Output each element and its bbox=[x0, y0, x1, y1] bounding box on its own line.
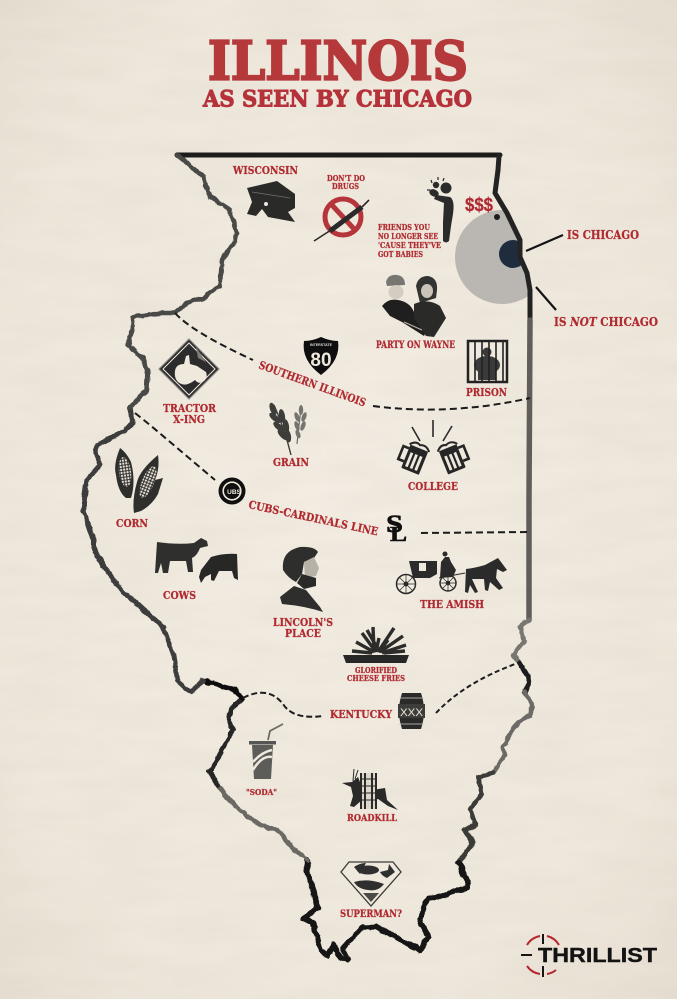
labels: DRUGS bbox=[332, 181, 359, 191]
labels: WISCONSIN bbox=[232, 164, 298, 177]
labels: GOT BABIES bbox=[378, 249, 423, 259]
icon: no drugs bbox=[314, 199, 369, 241]
icon: St. Louis Cardinals logo: L bbox=[390, 522, 407, 546]
labels: CUBS-CARDINALS LINE bbox=[247, 498, 379, 538]
labels bbox=[116, 164, 658, 920]
arrow: is not Chicago bbox=[536, 287, 556, 310]
labels: 'CAUSE THEY'VE bbox=[378, 240, 441, 250]
labels: KENTUCKY bbox=[330, 708, 392, 721]
arrow: is Chicago bbox=[526, 235, 563, 251]
labels: PARTY ON WAYNE bbox=[376, 340, 455, 351]
labels: SUPERMAN? bbox=[340, 909, 402, 920]
icon: tractor crossing sign bbox=[159, 339, 219, 399]
labels: X-ING bbox=[173, 413, 205, 426]
labels: THE AMISH bbox=[420, 598, 484, 611]
labels: ROADKILL bbox=[347, 813, 397, 824]
icon: whiskey barrel bbox=[398, 693, 425, 729]
icon: cheese fries bbox=[343, 627, 409, 663]
icon: corn bbox=[115, 448, 163, 513]
labels: "SODA" bbox=[246, 787, 277, 797]
dashed border lines bbox=[135, 313, 530, 717]
labels: NO LONGER SEE bbox=[378, 231, 438, 241]
icon: St. Louis Cardinals logo bbox=[386, 511, 407, 546]
icon: beer mugs bbox=[396, 420, 471, 475]
labels: COWS bbox=[163, 589, 196, 602]
icon: interstate 80 bbox=[304, 337, 338, 375]
labels: SOUTHERN ILLINOIS bbox=[257, 359, 368, 409]
icon: cows bbox=[155, 538, 238, 583]
labels: COLLEGE bbox=[408, 480, 458, 493]
icon: prison bbox=[468, 341, 507, 382]
logo: Thrillist bbox=[521, 934, 657, 977]
icon: parent holding baby bbox=[427, 177, 454, 242]
labels: CHEESE FRIES bbox=[347, 673, 405, 683]
icon: cheese bbox=[247, 181, 295, 222]
labels: PRISON bbox=[466, 385, 507, 399]
icon: horse and carriage bbox=[396, 552, 507, 594]
labels: IS NOT CHICAGO bbox=[554, 314, 658, 329]
icon: whiskey barrel: XXX bbox=[400, 707, 424, 719]
labels: GRAIN bbox=[273, 456, 309, 469]
icon: deer roadkill bbox=[342, 769, 398, 810]
icon: Cubs logo bbox=[218, 478, 246, 504]
labels: IS CHICAGO bbox=[567, 227, 639, 242]
labels: PLACE bbox=[285, 627, 321, 640]
icon: Superman shield bbox=[341, 862, 401, 906]
gray circle: not Chicago area bbox=[455, 210, 528, 304]
icon: interstate 80: 80 bbox=[310, 350, 332, 371]
state outline bbox=[83, 155, 531, 960]
title: ILLINOIS bbox=[208, 30, 468, 92]
dot: suburb marker bbox=[494, 214, 500, 220]
icon: soda cup bbox=[249, 724, 283, 779]
labels: GLORIFIED bbox=[355, 665, 397, 675]
icon: interstate 80: INTERSTATE bbox=[310, 343, 333, 347]
labels: $$$ bbox=[465, 195, 493, 216]
icon: Wayne and Garth bbox=[382, 275, 446, 337]
labels: TRACTOR bbox=[163, 402, 217, 415]
icon: Cubs logo: UBS bbox=[227, 489, 242, 496]
labels: CORN bbox=[116, 517, 148, 530]
labels: FRIENDS YOU bbox=[378, 222, 430, 232]
icon: St. Louis Cardinals logo: S bbox=[386, 511, 403, 538]
icon: wheat bbox=[268, 402, 308, 455]
title: AS SEEN BY CHICAGO bbox=[202, 86, 472, 112]
logo: Thrillist: THRILLIST bbox=[538, 945, 657, 967]
icon: Abraham Lincoln bbox=[280, 547, 323, 612]
labels: DON'T DO bbox=[327, 173, 365, 183]
labels: LINCOLN'S bbox=[273, 616, 333, 629]
